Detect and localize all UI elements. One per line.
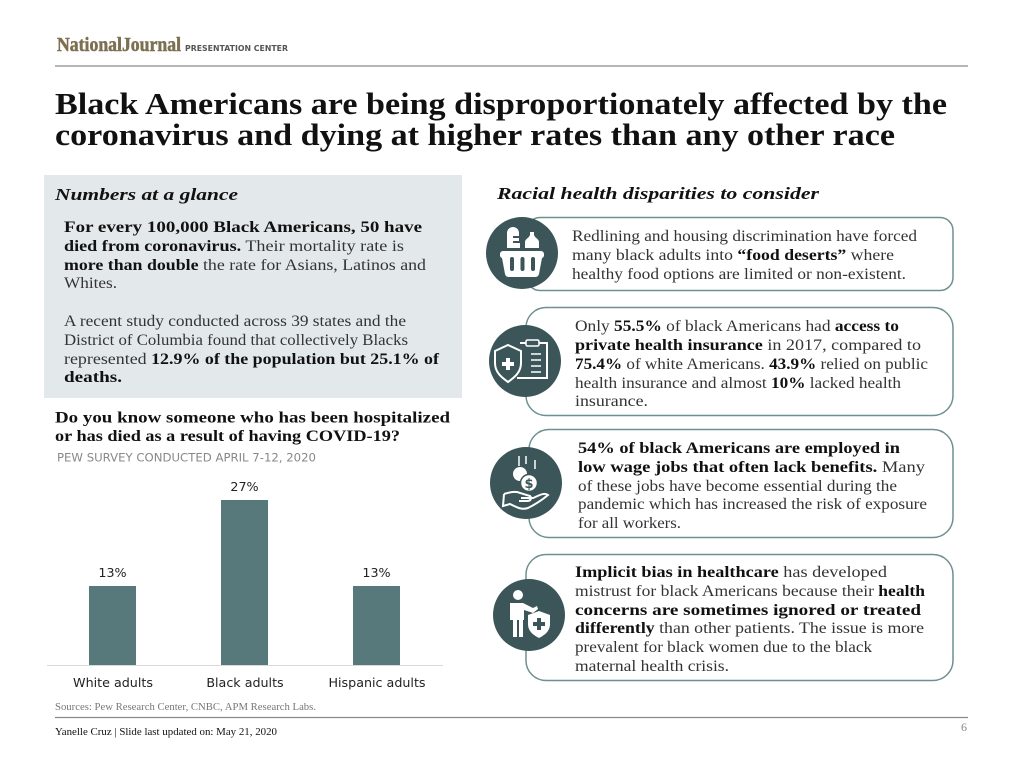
text block: many black adults into “food deserts” where bbox=[572, 247, 894, 264]
icon: hand and coin: $ bbox=[524, 477, 534, 492]
bar: hispanic adults: 13% bbox=[362, 565, 391, 580]
icon: shield and clipboard bbox=[489, 325, 561, 397]
logo: PRESENTATION CENTER bbox=[185, 44, 288, 53]
sources: Sources: Pew Research Center, CNBC, APM Research Labs. bbox=[55, 702, 316, 713]
text block: pandemic which has increased the risk of exposure bbox=[578, 496, 927, 513]
text block: Redlining and housing discrimination have forced bbox=[572, 228, 917, 245]
bar: white adults: 13% bbox=[98, 565, 127, 580]
footer credit: Yanelle Cruz | Slide last updated on: May 21, 2020 bbox=[55, 727, 277, 738]
icon: person and shield bbox=[493, 579, 565, 651]
chart subtitle: PEW SURVEY CONDUCTED APRIL 7-12, 2020 bbox=[57, 450, 316, 464]
text block bbox=[575, 564, 925, 675]
text block: Only 55.5% of black Americans had access to bbox=[575, 318, 899, 335]
text block: healthy food options are limited or non-existent. bbox=[572, 266, 906, 283]
chart question bbox=[55, 410, 450, 445]
panel heading: Numbers at a glance bbox=[54, 185, 239, 204]
bar: black adults: 27% bbox=[230, 479, 259, 494]
bar: black adults: Black adults bbox=[206, 675, 284, 690]
text block: maternal health crisis. bbox=[575, 658, 729, 675]
text block bbox=[575, 318, 928, 410]
right heading: Racial health disparities to consider bbox=[496, 184, 819, 203]
panel: low wage jobs bbox=[490, 430, 953, 538]
text block bbox=[578, 440, 927, 532]
text block: concerns are sometimes ignored or treated bbox=[575, 602, 921, 619]
text block: study: A recent study conducted across 39 states and the bbox=[64, 313, 406, 330]
bar chart bbox=[47, 479, 443, 690]
title bbox=[55, 87, 947, 152]
text block: study bbox=[64, 313, 440, 386]
panel: implicit bias bbox=[493, 554, 953, 680]
text block: study: represented 12.9% of the population but 25.1% of bbox=[64, 351, 440, 368]
title: coronavirus and dying at higher rates than any other race bbox=[55, 118, 895, 152]
text block: Implicit bias in healthcare has developed bbox=[575, 564, 887, 581]
text block: mortality: Whites. bbox=[64, 275, 117, 292]
panel: numbers at a glance bbox=[44, 175, 462, 398]
text block: mortality: more than double the rate for Asians, Latinos and bbox=[64, 257, 426, 274]
page number: 6 bbox=[961, 720, 967, 734]
text block: study: deaths. bbox=[64, 369, 122, 386]
icon: grocery basket bbox=[486, 217, 558, 289]
logo: NationalJournal bbox=[57, 34, 181, 56]
text block: for all workers. bbox=[578, 515, 681, 532]
text block: private health insurance in 2017, compared to bbox=[575, 337, 921, 354]
text block: mortality: died from coronavirus. Their mortality rate is bbox=[64, 238, 404, 255]
bar: black adults bbox=[206, 479, 284, 690]
text block: of these jobs have become essential during the bbox=[578, 478, 897, 495]
panel: health insurance bbox=[489, 308, 953, 416]
chart question: Do you know someone who has been hospitalized bbox=[55, 410, 450, 426]
logo bbox=[57, 34, 288, 56]
text block: health insurance and almost 10% lacked health bbox=[575, 375, 901, 392]
bar: hispanic adults: Hispanic adults bbox=[328, 675, 426, 690]
text block: prevalent for black women due to the black bbox=[575, 639, 872, 656]
text block: study: District of Columbia found that collectively Blacks bbox=[64, 332, 408, 349]
text block: low wage jobs that often lack benefits. Many bbox=[578, 459, 925, 476]
panel: food deserts bbox=[486, 217, 953, 290]
chart question: or has died as a result of having COVID-19? bbox=[55, 428, 400, 445]
bar: white adults: White adults bbox=[73, 675, 153, 690]
text block: mortality bbox=[64, 219, 426, 292]
text block: 54% of black Americans are employed in bbox=[578, 440, 900, 457]
text block: mortality: For every 100,000 Black Americans, 50 have bbox=[64, 219, 422, 236]
bar: hispanic adults bbox=[328, 565, 426, 690]
text block: differently than other patients. The issue is more bbox=[575, 620, 924, 637]
icon: hand and coin bbox=[490, 447, 562, 519]
text block: 75.4% of white Americans. 43.9% relied on public bbox=[575, 356, 928, 373]
bar: white adults bbox=[73, 565, 153, 690]
text block: insurance. bbox=[575, 393, 648, 410]
title: Black Americans are being disproportionately affected by the bbox=[55, 87, 947, 121]
text block bbox=[572, 228, 917, 283]
text block: mistrust for black Americans because their health bbox=[575, 583, 925, 600]
